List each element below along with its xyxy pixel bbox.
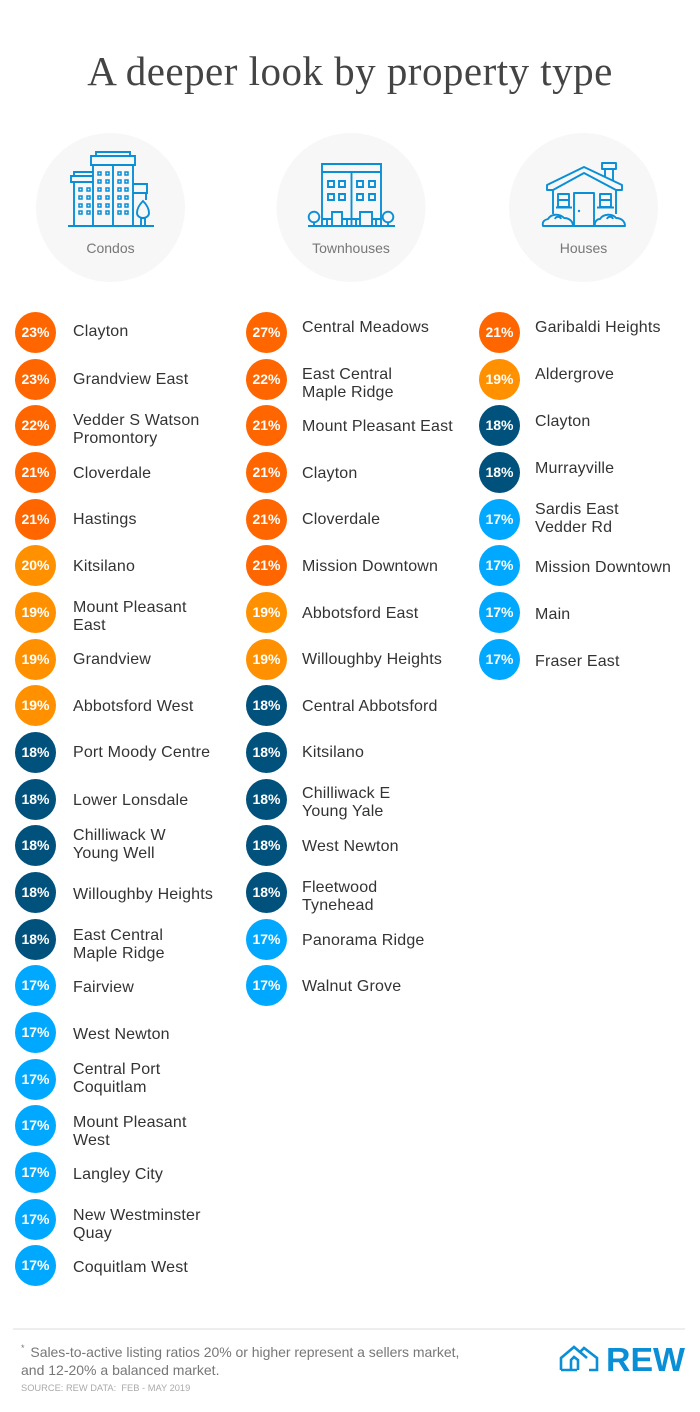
row: Mount Pleasant West 17%: West <box>73 1132 110 1148</box>
row: Mount Pleasant East 19%: East <box>73 616 106 634</box>
row: Central Port Coquitlam 17% <box>15 1059 160 1100</box>
row: Hastings 21%: 21% <box>21 511 50 527</box>
row: New Westminster Quay 17%: 17% <box>21 1211 50 1227</box>
row: Garibaldi Heights 21%: Garibaldi Heights <box>535 319 661 336</box>
row: Abbotsford East 19%: Abbotsford East <box>302 605 418 622</box>
row: Mount Pleasant East 21%: 21% <box>252 417 281 433</box>
row: Lower Lonsdale 18% <box>15 779 188 820</box>
row: Sardis East Vedder Rd 17%: Sardis East <box>535 501 619 518</box>
row: Clayton 21%: 21% <box>252 464 281 480</box>
row: Central Port Coquitlam 17%: 17% <box>21 1071 50 1087</box>
row: Mission Downtown 17% <box>479 545 700 586</box>
row: West Newton 17% <box>15 1012 170 1053</box>
row: Murrayville 18%: 18% <box>485 464 514 480</box>
row: East Central Maple Ridge 18%: Maple Ridge <box>73 944 165 962</box>
row: Central Port Coquitlam 17%: Central Port <box>73 1061 160 1078</box>
row: East Central Maple Ridge 22% <box>246 359 394 400</box>
row: Aldergrove 19%: Aldergrove <box>535 366 614 383</box>
row: Fleetwood Tynehead 18%: Tynehead <box>302 896 374 914</box>
row: Mount Pleasant East 21%: Mount Pleasant East <box>302 418 453 435</box>
row: Kitsilano 18%: 18% <box>252 744 281 760</box>
row: Clayton 18%: Clayton <box>535 413 590 430</box>
row: Grandview East 23% <box>15 359 188 400</box>
row: Mission Downtown 17%: 17% <box>485 557 514 573</box>
row: Walnut Grove 17%: Walnut Grove <box>302 978 401 995</box>
list: townhouses <box>246 312 453 1006</box>
footnote text <box>21 1343 466 1379</box>
row: West Newton 18% <box>246 825 399 866</box>
row: Garibaldi Heights 21% <box>479 312 700 353</box>
row: Chilliwack E Young Yale 18%: Chilliwack E <box>302 785 390 802</box>
row: Clayton 18% <box>479 405 700 446</box>
row: Vedder S Watson Promontory 22% <box>15 405 199 446</box>
row: Lower Lonsdale 18%: 18% <box>21 791 50 807</box>
footnote text: * Sales-to-active listing ratios 20% or higher represent a sellers market, <box>21 1343 459 1360</box>
row: East Central Maple Ridge 18%: East Central <box>73 927 163 944</box>
row: Central Abbotsford 18% <box>246 685 438 726</box>
row: Chilliwack E Young Yale 18% <box>246 779 390 820</box>
row: Coquitlam West 17%: Coquitlam West <box>73 1259 188 1276</box>
row: Willoughby Heights 19%: Willoughby Heights <box>302 651 442 668</box>
row: Port Moody Centre 18%: Port Moody Centre <box>73 744 210 761</box>
row: Central Abbotsford 18%: 18% <box>252 697 281 713</box>
row: Port Moody Centre 18%: 18% <box>21 744 50 760</box>
row: Mount Pleasant West 17% <box>15 1105 187 1148</box>
row: Langley City 17%: Langley City <box>73 1166 163 1183</box>
row: Murrayville 18%: Murrayville <box>535 460 614 477</box>
row: Willoughby Heights 19%: 19% <box>252 651 281 667</box>
row: Abbotsford West 19% <box>15 685 194 726</box>
row: Fairview 17%: 17% <box>21 977 50 993</box>
row: East Central Maple Ridge 18% <box>15 919 165 962</box>
row: Langley City 17% <box>15 1152 163 1193</box>
row: Murrayville 18% <box>479 452 700 493</box>
row: Coquitlam West 17%: 17% <box>21 1257 50 1273</box>
panel: condos category <box>68 151 154 256</box>
row: Mount Pleasant West 17%: 17% <box>21 1117 50 1133</box>
row: Hastings 21% <box>15 499 137 540</box>
row: Panorama Ridge 17% <box>246 919 424 960</box>
row: Grandview 19%: 19% <box>21 651 50 667</box>
row: Mission Downtown 17%: Mission Downtown <box>535 559 671 576</box>
row: Fleetwood Tynehead 18% <box>246 872 377 914</box>
row: Fleetwood Tynehead 18%: Fleetwood <box>302 879 377 896</box>
row: Aldergrove 19% <box>479 359 700 400</box>
row: East Central Maple Ridge 22%: Maple Ridge <box>302 384 394 400</box>
row: Abbotsford West 19%: Abbotsford West <box>73 698 194 715</box>
row: Fairview 17% <box>15 965 134 1006</box>
row: Lower Lonsdale 18%: Lower Lonsdale <box>73 792 188 809</box>
row: Abbotsford West 19%: 19% <box>21 697 50 713</box>
panel: houses category: Houses <box>560 240 607 256</box>
row: Panorama Ridge 17%: Panorama Ridge <box>302 932 424 949</box>
row: Central Meadows 27%: Central Meadows <box>302 319 429 336</box>
row: Vedder S Watson Promontory 22%: Promontory <box>73 430 157 446</box>
row: Cloverdale 21%: Cloverdale <box>73 465 151 482</box>
row: Willoughby Heights 18%: 18% <box>21 884 50 900</box>
row: Chilliwack E Young Yale 18%: Young Yale <box>302 802 384 820</box>
list: houses <box>479 312 689 681</box>
row: Grandview East 23%: 23% <box>21 371 50 387</box>
row: Grandview 19%: Grandview <box>73 651 151 668</box>
row: Clayton 21%: Clayton <box>302 465 357 482</box>
row: Cloverdale 21% <box>246 499 380 540</box>
row: Central Abbotsford 18%: Central Abbotsford <box>302 698 438 715</box>
row: Sardis East Vedder Rd 17%: 17% <box>485 511 514 527</box>
row: Chilliwack W Young Well 18%: 18% <box>21 837 50 853</box>
row: Kitsilano 20%: Kitsilano <box>73 558 135 575</box>
row: Chilliwack E Young Yale 18%: 18% <box>252 791 281 807</box>
row: Chilliwack W Young Well 18%: Young Well <box>73 844 155 862</box>
row: Fraser East 17% <box>479 639 700 680</box>
row: West Newton 17%: West Newton <box>73 1026 170 1043</box>
row: Kitsilano 20% <box>15 545 135 586</box>
row: Clayton 23% <box>15 312 128 353</box>
row: Cloverdale 21% <box>15 452 151 493</box>
row: Hastings 21%: Hastings <box>73 511 137 528</box>
row: Chilliwack W Young Well 18%: Chilliwack W <box>73 827 166 844</box>
row: Walnut Grove 17% <box>246 965 476 1006</box>
row: Walnut Grove 17%: 17% <box>252 977 281 993</box>
row: Main 17%: 17% <box>485 604 514 620</box>
row: Fraser East 17%: Fraser East <box>535 653 620 670</box>
row: Chilliwack W Young Well 18% <box>15 825 166 866</box>
row: New Westminster Quay 17%: Quay <box>73 1224 112 1242</box>
row: West Newton 18%: West Newton <box>302 838 399 855</box>
row: Cloverdale 21%: 21% <box>252 511 281 527</box>
row: Sardis East Vedder Rd 17% <box>479 499 700 540</box>
row: Langley City 17%: 17% <box>21 1164 50 1180</box>
row: New Westminster Quay 17% <box>15 1199 201 1242</box>
row: Cloverdale 21%: Cloverdale <box>302 511 380 528</box>
row: Willoughby Heights 19% <box>246 639 442 680</box>
row: Willoughby Heights 18% <box>15 872 213 913</box>
row: Clayton 23%: 23% <box>21 324 50 340</box>
row: Clayton 23%: Clayton <box>73 323 128 340</box>
row: Panorama Ridge 17%: 17% <box>252 931 281 947</box>
row: Mission Downtown 21%: 21% <box>252 557 281 573</box>
footnote text: and 12-20% a balanced market. <box>21 1362 219 1378</box>
row: Grandview East 23%: Grandview East <box>73 371 188 388</box>
row: Abbotsford East 19% <box>246 592 418 633</box>
row: Main 17% <box>479 592 700 633</box>
row: East Central Maple Ridge 22%: East Central <box>302 366 392 383</box>
row: New Westminster Quay 17%: New Westminster <box>73 1207 201 1224</box>
row: Mount Pleasant East 21% <box>246 405 453 446</box>
row: Mission Downtown 21%: Mission Downtown <box>302 558 438 575</box>
source note: SOURCE: REW DATA: FEB - MAY 2019 <box>21 1383 190 1393</box>
row: Fleetwood Tynehead 18%: 18% <box>252 884 281 900</box>
panel: houses category <box>542 162 626 256</box>
row: Kitsilano 18% <box>246 732 364 773</box>
row: Kitsilano 18%: Kitsilano <box>302 744 364 761</box>
row: Main 17%: Main <box>535 606 570 623</box>
row: Clayton 18%: 18% <box>485 417 514 433</box>
row: Central Port Coquitlam 17%: Coquitlam <box>73 1078 147 1096</box>
row: Fairview 17%: Fairview <box>73 979 134 996</box>
row: Cloverdale 21%: 21% <box>21 464 50 480</box>
row: West Newton 17%: 17% <box>21 1024 50 1040</box>
row: Kitsilano 20%: 20% <box>21 557 50 573</box>
row: Port Moody Centre 18% <box>15 732 210 773</box>
row: East Central Maple Ridge 18%: 18% <box>21 931 50 947</box>
row: Fraser East 17%: 17% <box>485 651 514 667</box>
row: Vedder S Watson Promontory 22%: 22% <box>21 417 50 433</box>
row: Vedder S Watson Promontory 22%: Vedder S Watson <box>73 412 199 429</box>
row: Mount Pleasant West 17%: Mount Pleasant <box>73 1114 187 1131</box>
row: Coquitlam West 17% <box>15 1245 188 1286</box>
row: Mount Pleasant East 19%: 19% <box>21 604 50 620</box>
title: A deeper look by property type <box>87 48 613 94</box>
row: Mount Pleasant East 19%: Mount Pleasant <box>73 599 187 616</box>
row: Abbotsford East 19%: 19% <box>252 604 281 620</box>
row: East Central Maple Ridge 22%: 22% <box>252 371 281 387</box>
row: Garibaldi Heights 21%: 21% <box>485 324 514 340</box>
row: Grandview 19% <box>15 639 151 680</box>
row: Mount Pleasant East 19% <box>15 592 187 634</box>
logo: REW: REW <box>606 1341 686 1378</box>
row: Aldergrove 19%: 19% <box>485 371 514 387</box>
row: Sardis East Vedder Rd 17%: Vedder Rd <box>535 518 612 536</box>
row: West Newton 18%: 18% <box>252 837 281 853</box>
row: Mission Downtown 21% <box>246 545 438 586</box>
row: Central Meadows 27%: 27% <box>252 324 281 340</box>
panel: townhouses category: Townhouses <box>312 240 390 256</box>
logo: REW <box>559 1344 687 1374</box>
row: Central Meadows 27% <box>246 312 429 353</box>
list: condos <box>15 312 213 1286</box>
panel: condos category: Condos <box>86 240 135 256</box>
panel: townhouses category <box>308 163 395 256</box>
row: Clayton 21% <box>246 452 357 493</box>
row: Willoughby Heights 18%: Willoughby Heights <box>73 886 213 903</box>
